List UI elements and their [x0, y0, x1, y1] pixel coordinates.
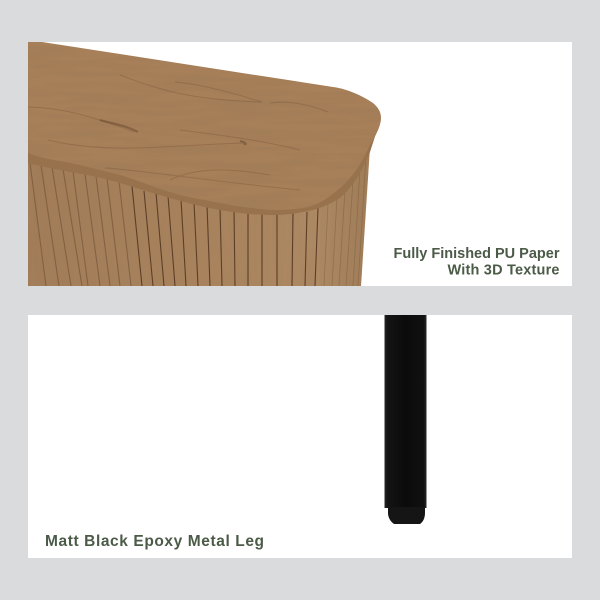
sideboard wood top surface [28, 42, 382, 212]
panel: wood finish background [28, 42, 572, 286]
label line 1: Fully Finished PU Paper [394, 246, 560, 262]
icon: black metal leg [384, 315, 426, 524]
label: metal leg: Matt Black Epoxy Metal Leg [45, 533, 264, 550]
label line 2: With 3D Texture [448, 262, 560, 278]
label: wood finish [394, 246, 560, 278]
panel: metal leg background [28, 315, 572, 558]
leg tube [384, 315, 426, 508]
photo: slatted wood sideboard [28, 42, 382, 286]
sideboard slatted body [28, 150, 371, 286]
infographic canvas [28, 42, 572, 558]
sideboard top edge band [28, 118, 381, 215]
leg foot cap [388, 507, 425, 524]
